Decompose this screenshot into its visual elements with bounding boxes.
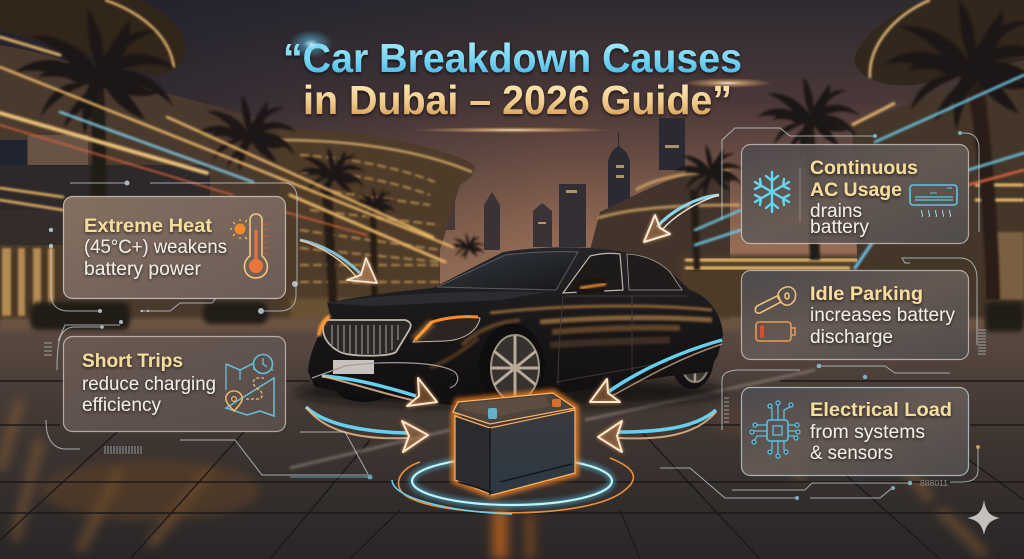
title lens flares	[289, 30, 773, 133]
background: light trails	[0, 37, 1024, 268]
side windows	[563, 253, 682, 293]
battery	[453, 393, 575, 495]
car shadow	[295, 376, 725, 408]
body: short trips: reduce charging	[82, 374, 216, 395]
HUD circuit lines right	[660, 128, 980, 500]
grille	[323, 320, 411, 356]
arrow: short trips upper	[322, 376, 437, 406]
body: idle parking: increases battery	[810, 305, 955, 326]
body: electrical load: from systems	[810, 422, 925, 443]
left light	[319, 316, 330, 336]
icon: sun and thermometer	[230, 214, 270, 278]
heading: continuous AC usage: Continuous	[810, 158, 918, 179]
heading: continuous AC usage: AC Usage	[810, 180, 902, 201]
front tyre	[338, 380, 390, 402]
bumper trim	[312, 363, 458, 388]
hood highlight	[327, 292, 548, 306]
heading: extreme heat: Extreme Heat	[84, 216, 213, 237]
battery lid	[453, 393, 575, 424]
body: continuous AC usage: battery	[810, 217, 869, 238]
background: palm trees	[15, 0, 1024, 320]
arrow: idle parking	[590, 340, 722, 402]
heading: short trips: Short Trips	[82, 351, 183, 372]
panel: short trips	[64, 336, 286, 432]
panel: extreme heat	[64, 196, 286, 298]
body: idle parking	[810, 305, 955, 348]
icon: air conditioner	[910, 185, 957, 217]
body: electrical load: & sensors	[810, 443, 893, 464]
license plate	[333, 360, 374, 374]
background: dusk sky	[0, 0, 1024, 340]
icon: low battery	[756, 322, 795, 341]
HUD circuit lines left	[46, 180, 372, 480]
heading: continuous AC usage	[810, 158, 918, 201]
body: electrical load	[810, 422, 925, 464]
panel: idle parking	[742, 270, 968, 360]
background: Dubai skyline	[440, 118, 685, 250]
body: short trips: efficiency	[82, 395, 161, 416]
background: dark hedges	[30, 302, 1024, 332]
battery glow	[455, 393, 575, 495]
body: continuous AC usage	[810, 201, 869, 238]
headlight	[413, 316, 480, 342]
car side reflections	[430, 306, 712, 368]
background: wet tiled pavement	[0, 318, 1024, 559]
car	[295, 247, 725, 408]
icon: map with clock	[226, 354, 274, 416]
front wheel	[479, 324, 545, 408]
HUD code label: 888011	[920, 479, 949, 488]
rear wheel	[670, 325, 714, 389]
heading: electrical load: Electrical Load	[810, 400, 952, 421]
sparkle watermark	[967, 500, 1000, 535]
body: continuous AC usage: drains	[810, 201, 862, 222]
door seams and chrome sill	[556, 296, 688, 385]
terminals	[488, 399, 561, 419]
icon: circuit chip	[750, 401, 800, 458]
background: right buildings	[590, 0, 1024, 330]
title	[283, 35, 742, 123]
mirror	[573, 278, 606, 294]
battery glow rings	[392, 457, 633, 514]
battery outline	[455, 410, 575, 495]
body: extreme heat: battery power	[84, 259, 202, 280]
body: extreme heat: (45°C+) weakens	[84, 237, 227, 258]
icon: snowflake	[755, 172, 789, 212]
battery body	[455, 410, 575, 495]
windshield	[437, 252, 578, 290]
arrow: short trips lower	[306, 407, 428, 452]
body: short trips	[82, 374, 216, 416]
HUD tick marks	[44, 330, 986, 454]
background: centre curved building	[280, 130, 475, 322]
background: left curved building	[0, 0, 300, 340]
title: “Car Breakdown Causes	[283, 35, 742, 81]
arrow: electrical load	[598, 410, 716, 452]
arrow: extreme heat	[300, 240, 377, 283]
car body	[308, 247, 723, 408]
heading: idle parking: Idle Parking	[810, 284, 923, 305]
icon: car key	[755, 287, 796, 313]
panel: electrical load	[742, 388, 968, 476]
body: idle parking: discharge	[810, 327, 893, 348]
panel: continuous AC usage	[742, 144, 968, 244]
arrow: continuous AC	[644, 195, 719, 242]
title: in Dubai – 2026 Guide”	[303, 77, 732, 123]
body: extreme heat	[84, 237, 227, 280]
